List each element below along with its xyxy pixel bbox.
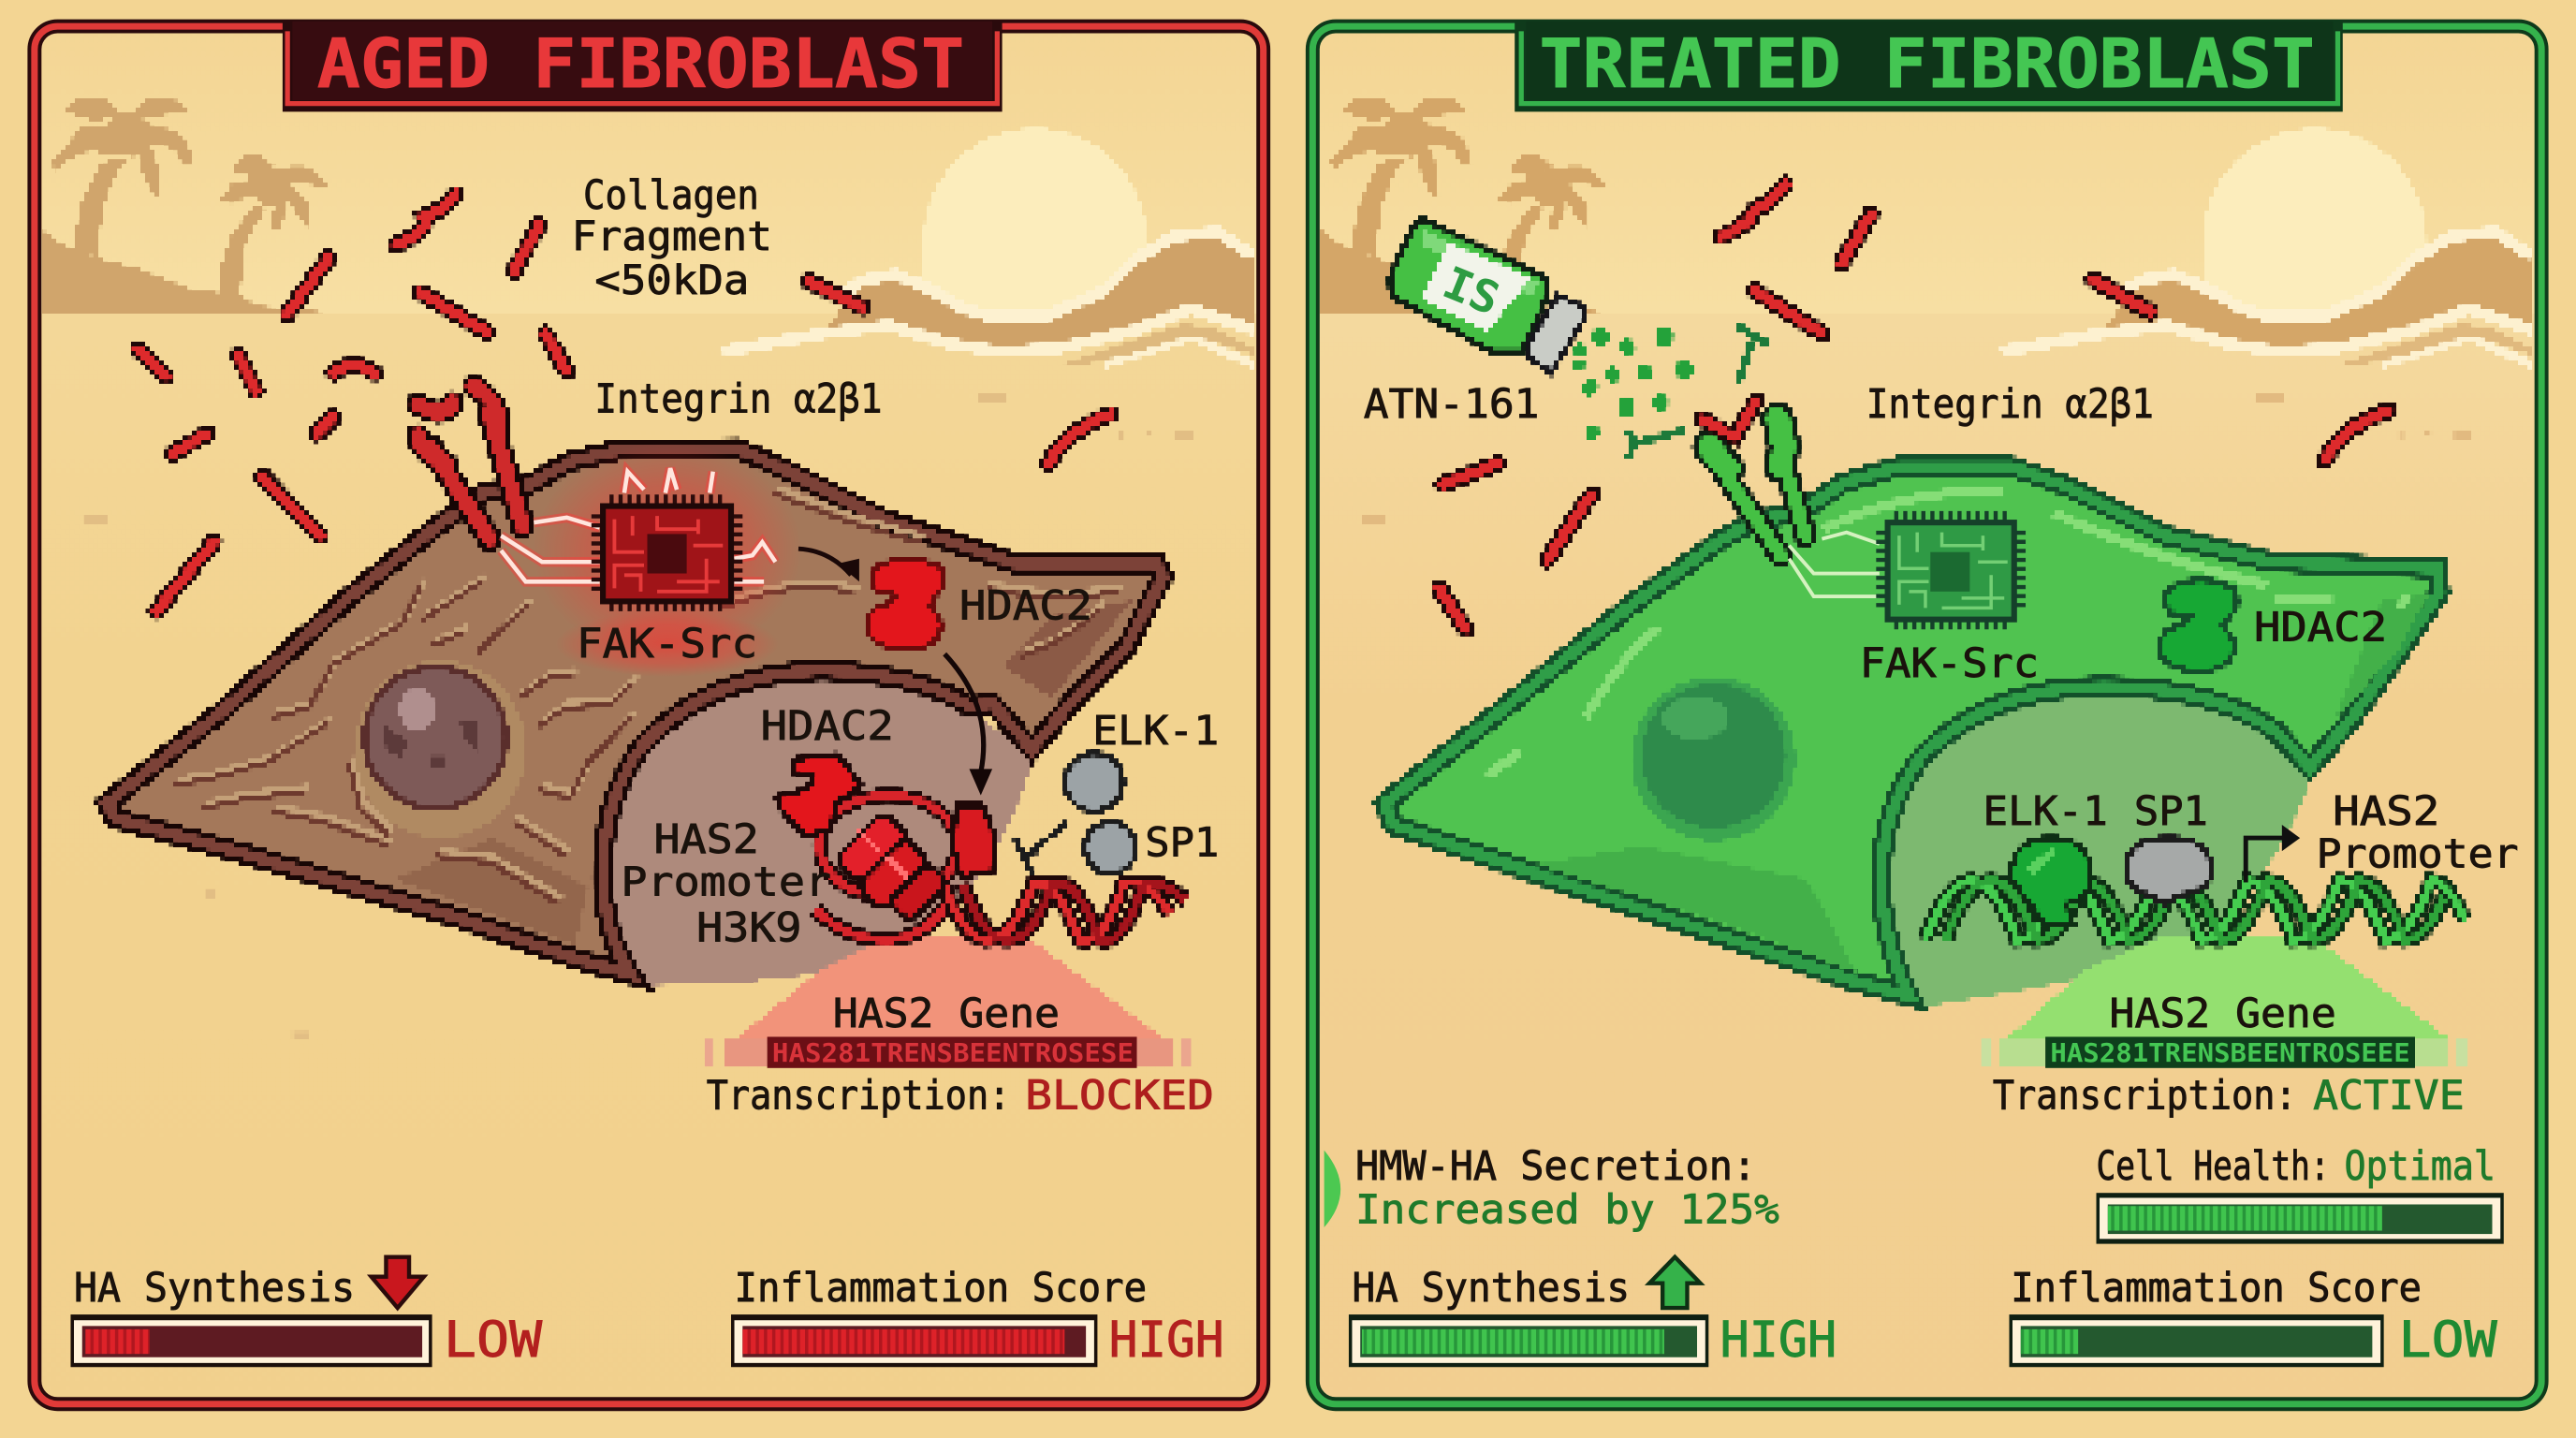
label: ELK-1: ELK-1	[1983, 788, 2108, 835]
meter: inflammation score high	[731, 1265, 1224, 1369]
icon: HDAC2 enzyme, treated	[2160, 580, 2237, 671]
cell body: aged fibroblast	[107, 448, 1170, 1043]
title banner: treated: TREATED FIBROBLAST	[1540, 24, 2315, 103]
meter: HA synthesis high: HIGH	[1720, 1312, 1837, 1369]
text labels: aged	[572, 172, 1219, 1120]
label: FAK-Src: FAK-Src	[577, 621, 757, 668]
label: transcription blocked: Transcription:	[707, 1073, 1010, 1120]
label: transcription blocked	[707, 1073, 1214, 1120]
gene bar: aged: HAS281TRENSBEENTROSESE	[772, 1039, 1134, 1068]
meter: inflammation score low	[2009, 1265, 2497, 1369]
gene bar: treated: HAS281TRENSBEENTROSEEE	[2050, 1039, 2410, 1068]
label: transcription active: ACTIVE	[2313, 1073, 2465, 1120]
label: ATN-161: ATN-161	[1364, 381, 1540, 428]
ATN-161 peptide particles	[1573, 326, 1769, 459]
DNA helix with bound factors, treated	[1925, 881, 2465, 940]
label: transcription blocked: BLOCKED	[1025, 1073, 1214, 1120]
frame: aged	[35, 26, 1264, 1404]
label: HAS2 promoter H3K9: H3K9	[696, 905, 801, 952]
label: collagen fragment	[572, 172, 772, 304]
label: HDAC2: HDAC2	[2254, 604, 2387, 651]
label: FAK-Src: FAK-Src	[1860, 640, 2039, 687]
label: HAS2 gene: HAS2 Gene	[833, 990, 1060, 1037]
label: SP1: SP1	[2134, 788, 2208, 835]
meter: HA synthesis low: LOW	[444, 1312, 543, 1369]
text labels: treated	[1355, 381, 2519, 1234]
DNA helix with nucleosome, aged	[816, 795, 1186, 941]
label: HAS2 promoter: HAS2	[2333, 788, 2439, 835]
meter: inflammation score low: Inflammation Score	[2011, 1265, 2422, 1312]
beach scenery: aged	[41, 33, 1257, 1400]
meter: HA synthesis high	[1349, 1257, 1837, 1369]
arrow: HDAC2 into nucleus	[944, 654, 992, 795]
icon: secretion marker	[1325, 1151, 1340, 1227]
meter: cell health optimal: Cell Health:	[2097, 1143, 2330, 1190]
meter: HA synthesis high: HA Synthesis	[1352, 1265, 1630, 1312]
label: HDAC2 cytoplasm: HDAC2	[959, 583, 1092, 630]
meter: cell health optimal: Optimal	[2345, 1143, 2496, 1190]
label: ELK-1: ELK-1	[1092, 708, 1219, 755]
icon: ELK-1 and SP1 detached	[1016, 754, 1136, 874]
label: HAS2 promoter H3K9	[621, 816, 831, 952]
arrow: HAS2 promoter transcription start	[2246, 825, 2300, 882]
label: collagen fragment: <50kDa	[594, 257, 749, 304]
icon: integrin receptor, aged	[417, 386, 522, 539]
meter: HA synthesis low: HA Synthesis	[74, 1265, 355, 1312]
meter: inflammation score low: LOW	[2398, 1312, 2497, 1369]
panel: aged fibroblast	[35, 22, 1264, 1404]
label: HAS2 promoter: Promoter	[2317, 831, 2519, 878]
label: transcription active: Transcription:	[1993, 1073, 2297, 1120]
meter: cell health optimal	[2097, 1143, 2504, 1244]
title banner: aged: AGED FIBROBLAST	[317, 24, 964, 103]
label: HDAC2 nucleus: HDAC2	[761, 703, 894, 750]
icon: ELK-1 and SP1 bound to DNA	[2011, 838, 2211, 923]
label: HMW-HA secretion	[1355, 1143, 1779, 1234]
icon: FAK-Src chip with glow, aged	[501, 442, 859, 677]
label: collagen fragment: Fragment	[572, 213, 772, 260]
panel: treated fibroblast	[1312, 22, 2541, 1404]
vial label: IS	[1436, 257, 1507, 326]
gene bar: aged	[705, 1036, 1191, 1068]
icon: HDAC2 enzyme in cytoplasm, aged	[867, 559, 944, 650]
frame: treated	[1312, 26, 2541, 1404]
label: HAS2 promoter H3K9: HAS2	[654, 816, 759, 863]
icon: ATN-161 vial	[1390, 218, 1586, 373]
label: SP1: SP1	[1145, 819, 1219, 866]
icon: nucleosome and HDAC2 bound to chromatin	[777, 755, 996, 922]
collagen fragments: treated	[1439, 184, 2389, 629]
meter: HA synthesis low	[70, 1257, 543, 1369]
collagen fragments: aged	[138, 194, 1110, 611]
label: HAS2 promoter	[2317, 788, 2519, 878]
label: integrin: Integrin α2β1	[1866, 381, 2154, 428]
beach scenery: treated	[1319, 33, 2535, 1400]
label: integrin: Integrin α2β1	[594, 376, 882, 423]
label: HAS2 gene: HAS2 Gene	[2110, 990, 2336, 1037]
icon: FAK-Src chip, treated	[1789, 516, 2021, 624]
meter: inflammation score high: HIGH	[1109, 1312, 1224, 1369]
label: HMW-HA secretion: Increased by 125%	[1355, 1187, 1779, 1234]
icon: integrin receptor with blocked fragment, treated	[1702, 401, 1806, 555]
gene bar: treated	[1982, 1036, 2467, 1068]
label: HMW-HA secretion: HMW-HA Secretion:	[1355, 1143, 1756, 1190]
label: HAS2 promoter H3K9: Promoter	[621, 859, 831, 906]
cell body: treated fibroblast	[1385, 466, 2448, 1038]
meter: inflammation score high: Inflammation Score	[735, 1265, 1147, 1312]
label: collagen fragment: Collagen	[583, 172, 759, 219]
